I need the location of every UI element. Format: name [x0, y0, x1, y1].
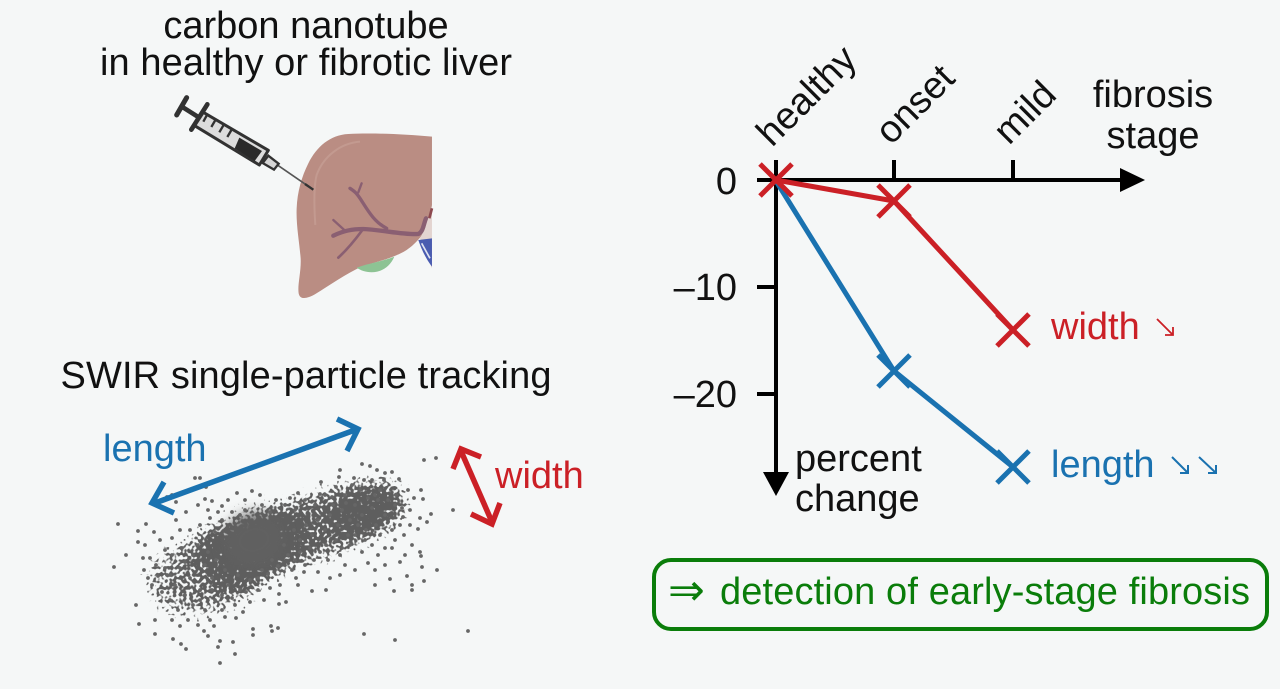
arrow: width [453, 449, 500, 524]
callout: detection of early-stage fibrosis [654, 560, 1267, 629]
y tick labels: 0 [716, 161, 737, 203]
callout: detection of early-stage fibrosis: detection of early-stage fibrosis [720, 571, 1250, 613]
axis label: percent change: percent [795, 438, 922, 480]
stage labels [749, 38, 1213, 157]
axis label: percent change: change [795, 478, 920, 520]
stage labels: onset [868, 57, 963, 152]
stage labels: fibrosis [1093, 74, 1213, 116]
heading: carbon nanotube in liver: carbon nanotube [163, 5, 449, 47]
heading: carbon nanotube in liver [100, 5, 512, 84]
y axis [757, 160, 789, 496]
label: width decrease: width [1050, 306, 1140, 348]
y tick labels: –10 [674, 267, 737, 309]
label: length decrease [1051, 444, 1216, 486]
stage labels: healthy [749, 38, 865, 154]
y tick labels [674, 161, 737, 416]
heading: carbon nanotube in liver: in healthy or fibrotic liver [100, 42, 512, 84]
stage labels: stage [1107, 115, 1199, 157]
label: length: length [103, 428, 207, 470]
chart: percent change by fibrosis stage [674, 38, 1216, 520]
heading: SWIR tracking: SWIR single-particle tracking [60, 355, 552, 397]
callout: detection of early-stage fibrosis: ⇒ [668, 565, 705, 616]
icon: syringe and liver [177, 98, 432, 298]
scatter plot of tracked particle [114, 458, 468, 663]
x axis [757, 160, 1145, 192]
arrow: length [152, 419, 358, 513]
series: width [760, 164, 1029, 346]
series: length [776, 181, 1029, 483]
syringe [177, 98, 313, 190]
y tick labels: –20 [674, 374, 737, 416]
liver [297, 134, 432, 298]
stage labels: mild [986, 73, 1065, 152]
label: width: width [494, 455, 584, 497]
axis label: percent change [795, 438, 922, 520]
label: length decrease: length [1051, 444, 1155, 486]
